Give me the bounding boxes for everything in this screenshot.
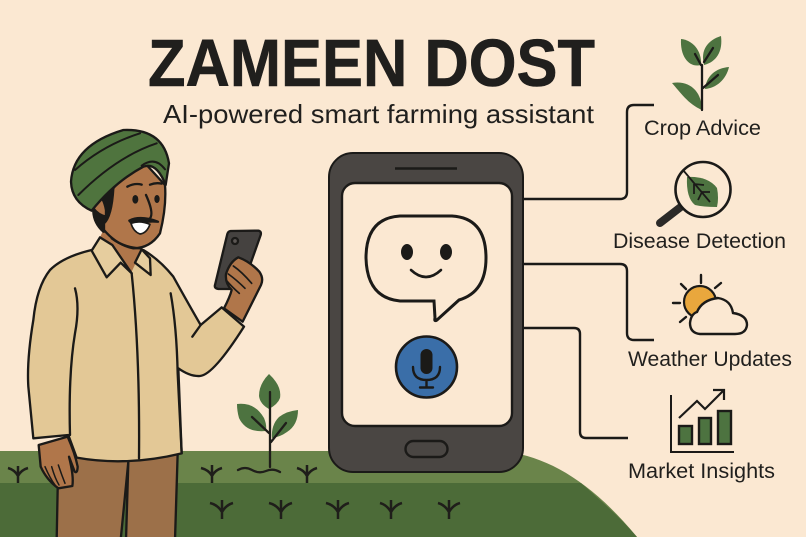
phone in hand: [215, 231, 261, 289]
title: ZAMEEN DOST: [148, 26, 595, 101]
home button: [406, 441, 448, 457]
microphone button: [396, 336, 457, 398]
collar: [92, 237, 132, 277]
shirt: [28, 250, 244, 461]
phone screen: [342, 183, 512, 426]
icon: magnifier over leaf: [660, 162, 730, 223]
turban: [71, 130, 169, 211]
hair: [93, 183, 115, 232]
label: crop advice: Crop Advice: [644, 116, 761, 140]
label: weather updates: Weather Updates: [628, 347, 792, 371]
chat bubble with smiley: [366, 216, 486, 321]
smartphone: [329, 153, 523, 472]
label: disease detection: Disease Detection: [613, 229, 786, 253]
farmer figure: [28, 130, 262, 537]
sprouts in the field: [8, 465, 460, 519]
ear: [92, 195, 106, 217]
ground: field and hill: [0, 451, 637, 537]
seedling plant: [237, 374, 298, 472]
trousers: [57, 453, 178, 537]
facial features: [132, 195, 138, 204]
icon: sun and cloud: [673, 275, 747, 334]
raised hand: [224, 257, 262, 322]
label: market insights: Market Insights: [628, 459, 775, 483]
icon: bar chart with arrow: [671, 390, 734, 452]
subtitle: AI-powered smart farming assistant: [163, 99, 595, 129]
neck: [100, 230, 143, 272]
phone speaker: [395, 167, 457, 170]
icon: crop plant: [672, 36, 729, 110]
face: [104, 165, 165, 248]
connector lines: [523, 105, 654, 438]
left hand: [39, 437, 78, 488]
